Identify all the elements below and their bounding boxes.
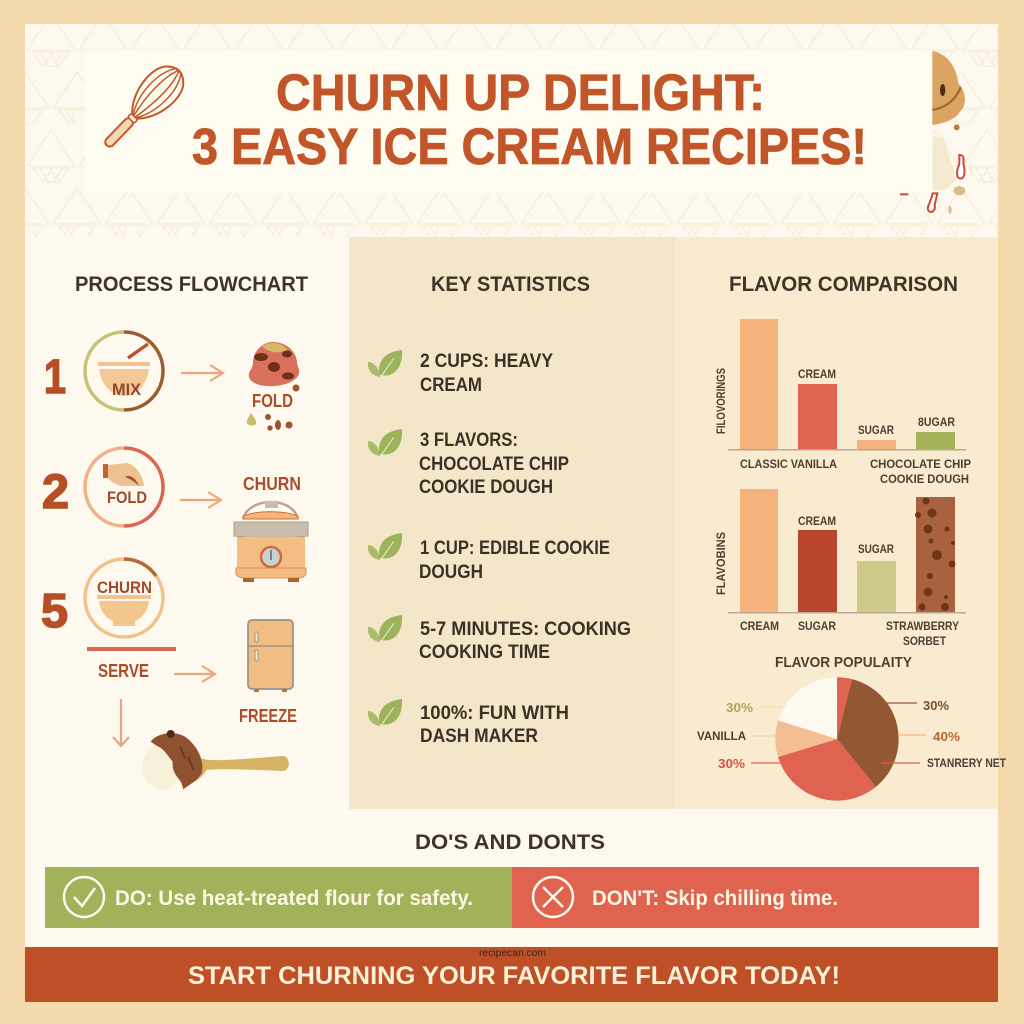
stat: fun bbox=[368, 699, 569, 747]
icon: mix circle: MIX bbox=[112, 380, 142, 399]
don't bar bbox=[512, 867, 979, 928]
bar chart: top: 8UGAR bbox=[918, 415, 955, 429]
bar chart: top: CREAM bbox=[798, 367, 836, 381]
bar chart: top bbox=[714, 319, 971, 486]
icon: spoon with scoop bbox=[142, 730, 289, 789]
bar chart: bottom: FLAVOBINS bbox=[714, 532, 728, 595]
do bar: DO: Use heat-treated flour for safety. bbox=[115, 887, 473, 910]
icon: ice cream scoop bbox=[249, 342, 300, 392]
pie chart: 30% bbox=[718, 756, 745, 771]
heading: process flowchart: PROCESS FLOWCHART bbox=[75, 273, 308, 296]
pie chart: 30% bbox=[923, 698, 949, 713]
title bbox=[192, 64, 867, 175]
icon: fold circle bbox=[85, 448, 163, 526]
label: freeze: FREEZE bbox=[239, 706, 297, 726]
stat: heavy cream: 2 CUPS: HEAVY bbox=[420, 351, 553, 372]
heading: flavor popularity: FLAVOR POPULAITY bbox=[775, 654, 912, 671]
divider line bbox=[87, 647, 176, 651]
don't bar: DON'T: Skip chilling time. bbox=[592, 887, 838, 910]
panel: header bbox=[25, 24, 998, 237]
bar chart: top: COOKIE DOUGH bbox=[880, 472, 969, 486]
bar chart: top: SUGAR bbox=[858, 423, 894, 437]
stat: flavors bbox=[368, 429, 569, 498]
panel: key statistics bbox=[349, 237, 675, 809]
label: churn: CHURN bbox=[243, 474, 301, 494]
step number 2: 2 bbox=[42, 466, 69, 519]
bar chart: bottom: STRAWBERRY bbox=[886, 619, 959, 633]
footer banner bbox=[25, 947, 998, 1002]
bar chart: bottom: CREAM bbox=[798, 514, 836, 528]
icon: mix circle bbox=[85, 332, 163, 410]
stat: fun: 100%: FUN WITH bbox=[420, 703, 569, 724]
icon: ice cream maker bbox=[234, 501, 308, 582]
arrow bbox=[174, 666, 215, 682]
label: fold: FOLD bbox=[252, 391, 293, 411]
heading: do's and donts: DO'S AND DONTS bbox=[415, 831, 605, 854]
arrow bbox=[181, 365, 223, 381]
footer banner: START CHURNING YOUR FAVORITE FLAVOR TODAY! bbox=[188, 962, 840, 990]
stat: cooking time bbox=[368, 615, 631, 663]
icon: fridge bbox=[248, 620, 293, 692]
do bar bbox=[45, 867, 512, 928]
bar chart: top: CLASSIC VANILLA bbox=[740, 457, 837, 471]
heading: flavor comparison: FLAVOR COMPARISON bbox=[729, 273, 958, 296]
arrow: down bbox=[113, 699, 129, 746]
bar chart: bottom: CREAM bbox=[740, 619, 779, 633]
bar chart: bottom: SUGAR bbox=[798, 619, 836, 633]
icon: churn circle bbox=[85, 559, 163, 637]
arrow bbox=[180, 492, 221, 508]
panel: do's and don'ts bbox=[25, 809, 998, 947]
icon: fold circle: FOLD bbox=[107, 488, 147, 507]
pie chart: STANRERY NET bbox=[927, 756, 1007, 770]
step number 1: 1 bbox=[44, 351, 66, 404]
icon: crumbs bbox=[247, 413, 292, 431]
pie chart: VANILLA bbox=[697, 729, 746, 743]
heading: key statistics: KEY STATISTICS bbox=[431, 273, 590, 296]
panel: flavor comparison bbox=[675, 237, 1007, 809]
step number 5: 5 bbox=[41, 585, 68, 638]
icon: whisk bbox=[94, 57, 193, 158]
stat: cookie dough: 1 CUP: EDIBLE COOKIE bbox=[420, 538, 610, 559]
title: 3 EASY ICE CREAM RECIPES! bbox=[192, 118, 867, 175]
stat: flavors: COOKIE DOUGH bbox=[419, 477, 553, 498]
source credit: recipecan.com bbox=[479, 948, 546, 959]
stat: heavy cream: CREAM bbox=[420, 375, 482, 396]
stat: cookie dough bbox=[368, 533, 610, 583]
icon: cookie and drips bbox=[900, 51, 965, 214]
bar chart: bottom: SORBET bbox=[903, 634, 947, 648]
stat: cooking time: 5-7 MINUTES: COOKING bbox=[420, 619, 631, 640]
pie chart: 30% bbox=[726, 700, 753, 715]
stat: heavy cream bbox=[368, 350, 553, 396]
bar chart: bottom: SUGAR bbox=[858, 542, 894, 556]
bar chart: top: FILOVORINGS bbox=[714, 368, 728, 434]
icon: churn circle: CHURN bbox=[97, 578, 152, 597]
pie chart: 40% bbox=[933, 729, 960, 744]
stat: flavors: CHOCOLATE CHIP bbox=[419, 454, 569, 475]
stat: fun: DASH MAKER bbox=[420, 726, 538, 747]
title: CHURN UP DELIGHT: bbox=[276, 64, 765, 121]
stat: flavors: 3 FLAVORS: bbox=[420, 430, 518, 451]
pie chart bbox=[697, 677, 1007, 801]
stat: cookie dough: DOUGH bbox=[419, 562, 483, 583]
stat: cooking time: COOKING TIME bbox=[419, 642, 550, 663]
label: serve: SERVE bbox=[98, 661, 149, 681]
panel: process flowchart bbox=[25, 237, 349, 809]
bar chart: top: CHOCOLATE CHIP bbox=[870, 457, 971, 471]
bar chart: bottom bbox=[714, 489, 966, 648]
